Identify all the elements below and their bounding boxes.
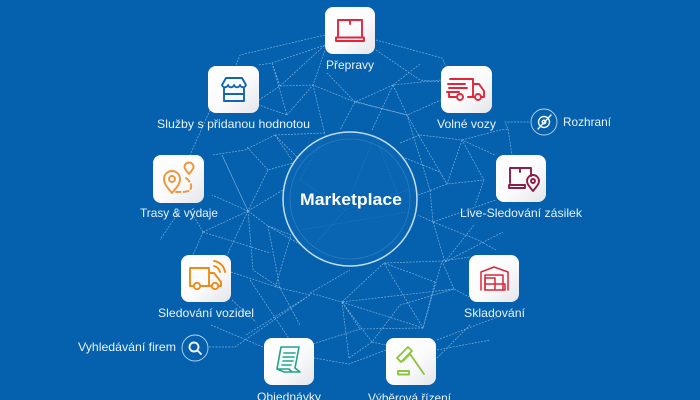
tile: Volné vozy: [437, 66, 496, 131]
icon: laptop: [336, 20, 364, 41]
callout: Rozhraní: Rozhraní: [563, 115, 612, 129]
icon: magnifier: [190, 342, 201, 354]
tile: Trasy & výdaje: [140, 155, 218, 220]
tile: Přepravy: Přepravy: [326, 58, 374, 72]
tile: Skladování: Skladování: [464, 306, 526, 320]
central circle: Marketplace: [283, 132, 417, 266]
tile: Trasy & výdaje: Trasy & výdaje: [140, 206, 218, 220]
icon: laptop with pin: [509, 168, 539, 191]
icon: document: [277, 347, 300, 372]
tile: Skladování: [464, 255, 526, 320]
tile: Sledování vozidel: Sledování vozidel: [158, 306, 254, 320]
tile: Výběrová řízení: [368, 338, 452, 400]
tile: Služby s přidanou hodnotou: Služby s přidanou hodnotou: [157, 117, 310, 131]
tile: Volné vozy: Volné vozy: [437, 117, 496, 131]
dashed network background: [160, 35, 530, 364]
tile: Sledování vozidel: [158, 255, 254, 320]
callout: Vyhledávání firem: Vyhledávání firem: [78, 340, 176, 354]
icon: route pins: [164, 162, 194, 193]
faint inner network: [300, 135, 408, 250]
icon: shop: [222, 78, 246, 101]
tile: Live-Sledování zásilek: Live-Sledování zásilek: [460, 206, 583, 220]
tile: Přepravy: [325, 7, 375, 72]
icon: gavel: [397, 347, 424, 374]
icon: target: [538, 115, 551, 129]
tile: Objednávky: [257, 338, 321, 400]
tile: Služby s přidanou hodnotou: [157, 66, 310, 131]
icon: warehouse: [481, 267, 508, 290]
callout: Vyhledávání firem: [78, 335, 208, 361]
icon: fast truck: [447, 79, 484, 100]
icon: truck with signal: [190, 261, 225, 289]
tile: Live-Sledování zásilek: [460, 155, 583, 220]
callout: Rozhraní: [531, 109, 612, 135]
central circle: Marketplace: Marketplace: [300, 190, 402, 209]
